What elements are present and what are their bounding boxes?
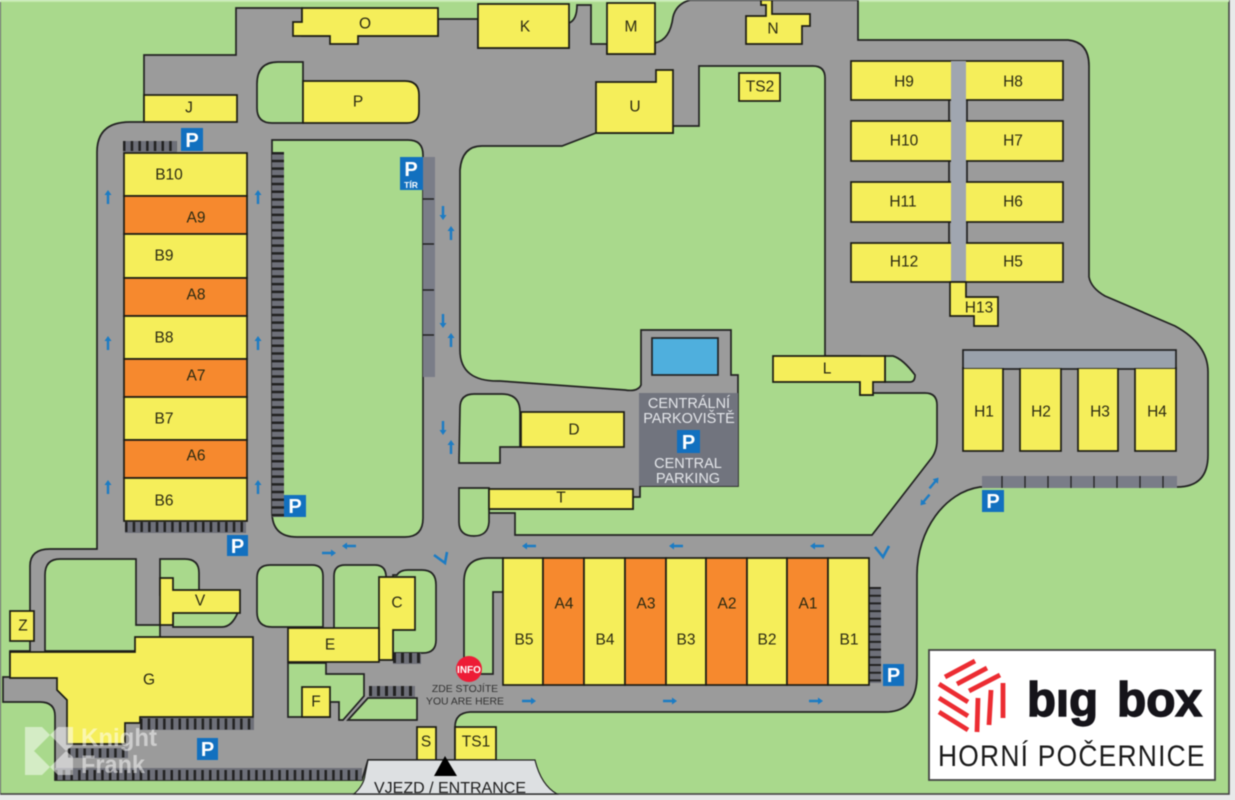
building E: E	[325, 636, 335, 654]
parking signs: P	[231, 536, 244, 558]
south building row B5 to B1 and A4 to A1: A2	[718, 596, 736, 612]
green: patch by building D	[459, 394, 520, 463]
buildings H1 to H4: H2	[1031, 404, 1051, 420]
building C	[379, 577, 415, 660]
Knight Frank watermark: Frank	[81, 751, 145, 779]
central parking area: PARKOVIŠTĚ	[643, 410, 735, 427]
west building row B10 to B6 and A9 to A6: B7	[155, 410, 173, 428]
green: patches around building F	[288, 663, 417, 720]
green: patch by building P	[257, 62, 303, 123]
building U: U	[629, 98, 641, 116]
buildings H5 to H12: H11	[889, 194, 917, 210]
building D	[521, 412, 624, 447]
building H13	[950, 282, 998, 326]
buildings H5 to H12: H9	[894, 74, 914, 90]
south building row B5 to B1 and A4 to A1: B4	[596, 632, 615, 648]
building V: V	[195, 592, 206, 610]
south building row B5 to B1 and A4 to A1: B2	[758, 632, 776, 648]
wordmark: big box: box	[1117, 674, 1202, 727]
building G	[10, 637, 253, 744]
south building row B5 to B1 and A4 to A1: B5	[515, 632, 533, 648]
parking signs: P	[288, 496, 302, 518]
parking signs	[181, 128, 1004, 761]
west building row B10 to B6 and A9 to A6: A7	[187, 368, 205, 384]
building D: D	[568, 422, 580, 438]
wordmark: big box: bıg	[1027, 674, 1098, 727]
building TS1	[455, 727, 496, 760]
building C: C	[391, 594, 403, 612]
buildings H1 to H4	[963, 350, 1176, 451]
Knight Frank watermark: Knight	[81, 724, 158, 752]
H block connectors	[949, 100, 967, 243]
truck parking sign	[400, 157, 423, 190]
buildings H5 to H12	[851, 61, 1063, 282]
green: patches around building V	[160, 559, 238, 627]
building V	[160, 578, 240, 625]
building E	[288, 628, 379, 662]
south building row B5 to B1 and A4 to A1: B3	[677, 632, 695, 648]
building M: M	[625, 18, 637, 36]
west building row B10 to B6 and A9 to A6: B10	[155, 166, 183, 184]
building U	[596, 70, 673, 133]
parking signs: P	[887, 665, 900, 687]
west building row B10 to B6 and A9 to A6: B8	[155, 330, 173, 346]
entrance gate	[354, 756, 557, 797]
building O: O	[359, 16, 371, 32]
building L	[773, 356, 885, 395]
building TS2	[739, 73, 780, 101]
central parking area	[639, 393, 738, 487]
truck parking sign: P	[404, 159, 418, 181]
building TS1: TS1	[462, 734, 490, 750]
building P: P	[353, 94, 363, 110]
building T: T	[556, 490, 566, 506]
buildings H5 to H12: H6	[1003, 194, 1023, 210]
parking signs: P	[185, 130, 199, 152]
south building row B5 to B1 and A4 to A1: A4	[555, 596, 574, 612]
building J	[144, 95, 237, 122]
building K: K	[520, 18, 531, 36]
buildings H5 to H12: H8	[1003, 74, 1023, 90]
green: patches near buildings E and C	[257, 565, 436, 653]
building L: L	[823, 360, 832, 378]
building F	[302, 687, 330, 717]
parking signs: P	[201, 739, 214, 761]
south building row B5 to B1 and A4 to A1	[503, 558, 869, 685]
green: patch beside Info point	[464, 558, 503, 674]
west building row B10 to B6 and A9 to A6: A6	[187, 448, 205, 464]
building T	[489, 489, 633, 509]
info point: you are here: INFO	[457, 665, 481, 676]
west building row B10 to B6 and A9 to A6: A8	[187, 286, 205, 304]
buildings H1 to H4: H4	[1147, 404, 1167, 420]
west building row B10 to B6 and A9 to A6: B6	[155, 492, 173, 510]
entrance gate: VJEZD / ENTRANCE	[374, 780, 526, 797]
west building row B10 to B6 and A9 to A6: A9	[187, 210, 205, 226]
building TS2: TS2	[746, 78, 774, 96]
buildings H5 to H12: H7	[1003, 132, 1023, 150]
logo panel: big box Horní Počernice	[929, 650, 1215, 780]
building N	[746, 0, 810, 44]
buildings H1 to H4: H3	[1090, 404, 1110, 420]
building J: J	[185, 100, 193, 116]
Knight Frank watermark	[25, 724, 158, 779]
buildings H5 to H12: H10	[890, 132, 919, 150]
west building row B10 to B6 and A9 to A6: B9	[155, 248, 173, 264]
building P	[303, 81, 419, 123]
south building row B5 to B1 and A4 to A1: A1	[799, 596, 817, 612]
green: triangle by building L	[885, 356, 915, 382]
green: west lawn beside parking	[272, 140, 423, 537]
south building row B5 to B1 and A4 to A1: B1	[840, 632, 858, 648]
building S: S	[421, 734, 431, 750]
blue traffic arrows	[104, 190, 941, 704]
green: lawn by building G	[45, 559, 160, 651]
info point: you are here: ZDE STOJÍTE	[432, 682, 498, 695]
info point: you are here: YOU ARE HERE	[426, 696, 504, 708]
building Z: Z	[18, 618, 28, 634]
info point: you are here	[426, 656, 504, 708]
truck parking sign: TÍR	[404, 180, 418, 190]
buildings H1 to H4: H1	[974, 404, 994, 420]
central parking area: CENTRAL	[654, 456, 722, 472]
building K	[478, 4, 569, 48]
building F: F	[311, 694, 321, 710]
building O	[293, 8, 438, 44]
pool	[652, 338, 718, 375]
building S	[417, 727, 436, 760]
wordmark: big box	[1027, 674, 1202, 727]
parking strips	[55, 141, 1177, 780]
location name: HORNÍ POČERNICE	[938, 738, 1206, 772]
building H13: H13	[965, 300, 993, 316]
green: central large lawn	[460, 66, 937, 535]
green: patch by building T	[459, 488, 489, 536]
building Z	[10, 611, 34, 641]
buildings H5 to H12: H5	[1003, 254, 1023, 270]
building N: N	[767, 20, 779, 38]
building G: G	[143, 672, 155, 688]
central parking area: P	[682, 432, 695, 454]
central parking area: PARKING	[656, 471, 720, 487]
west building row B10 to B6 and A9 to A6	[124, 153, 247, 521]
central parking area: CENTRÁLNÍ	[648, 395, 730, 412]
building M	[607, 3, 655, 54]
icon: red striped cube	[939, 661, 1003, 732]
south building row B5 to B1 and A4 to A1: A3	[637, 596, 655, 612]
buildings H5 to H12: H12	[890, 254, 918, 270]
parking signs: P	[986, 491, 1000, 513]
